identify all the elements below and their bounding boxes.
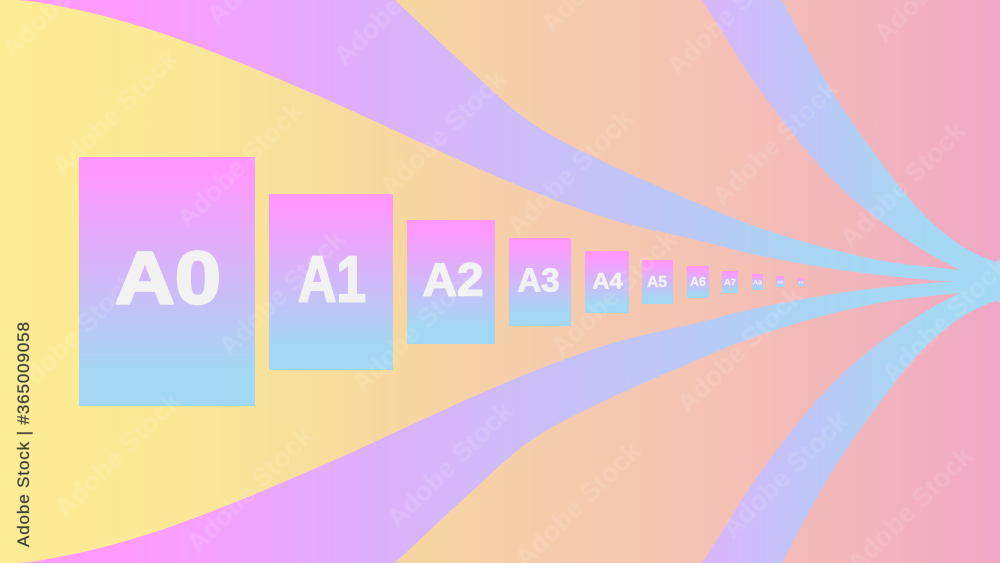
- sheet: A8: [752, 274, 763, 290]
- watermark: repeated stock text: Adobe Stock: [6, 265, 144, 404]
- sheet: A10: A10: [799, 280, 804, 284]
- sheet: A6: A6: [690, 275, 706, 289]
- watermark: repeated stock text: Adobe Stock: [346, 260, 484, 399]
- sheet: A7: [722, 271, 738, 293]
- sheet: A1: A1: [298, 242, 366, 316]
- watermark: repeated stock text: Adobe Stock: [381, 395, 519, 534]
- sheet: A4: A4: [592, 269, 623, 294]
- ribbon: lower short: [702, 260, 1000, 563]
- sheet: A0: [79, 157, 255, 406]
- stock id caption: Adobe Stock | #365009058: [14, 322, 33, 547]
- sheet: A10: [798, 278, 804, 286]
- watermark: repeated stock text: Adobe Stock: [181, 420, 319, 559]
- sheet: A4: [585, 251, 629, 313]
- watermark: repeated stock text: Adobe Stock: [213, 223, 351, 362]
- sheet: A3: A3: [518, 262, 560, 298]
- watermark: repeated stock text: Adobe Stock: [671, 280, 809, 419]
- sheet: A5: A5: [647, 274, 667, 291]
- ribbon: upper short: [702, 0, 1000, 303]
- sheet: A2: A2: [422, 254, 484, 306]
- watermark: repeated stock text: Adobe Stock: [374, 63, 512, 202]
- sheet: A9: A9: [777, 280, 784, 284]
- watermark: repeated stock text: Adobe Stock: [834, 115, 972, 254]
- sheet: A5: [642, 260, 673, 304]
- sheet: A8: A8: [753, 280, 762, 286]
- sheet: A3: [509, 238, 571, 326]
- sheet: A9: [776, 276, 784, 287]
- sheet: A2: [407, 220, 495, 344]
- watermark: repeated stock text: Adobe Stock: [171, 95, 309, 234]
- watermark: repeated stock text: Adobe Stock: [706, 73, 844, 212]
- watermark: repeated stock text: Adobe Stock: [545, 224, 683, 363]
- watermark: repeated stock text: Adobe Stock: [501, 103, 639, 242]
- ribbon: upper long: [17, 0, 975, 282]
- sheet: A1: [269, 194, 393, 370]
- sheet: A7: A7: [724, 277, 736, 287]
- sheet: A6: [687, 266, 709, 298]
- watermark: repeated stock text: Adobe Stock: [46, 43, 184, 182]
- watermark: repeated stock text: Adobe Stock: [716, 405, 854, 544]
- watermark: repeated stock text: Adobe Stock: [49, 385, 187, 524]
- ribbon: lower long: [17, 281, 975, 563]
- sheet: A0: A0: [115, 236, 221, 320]
